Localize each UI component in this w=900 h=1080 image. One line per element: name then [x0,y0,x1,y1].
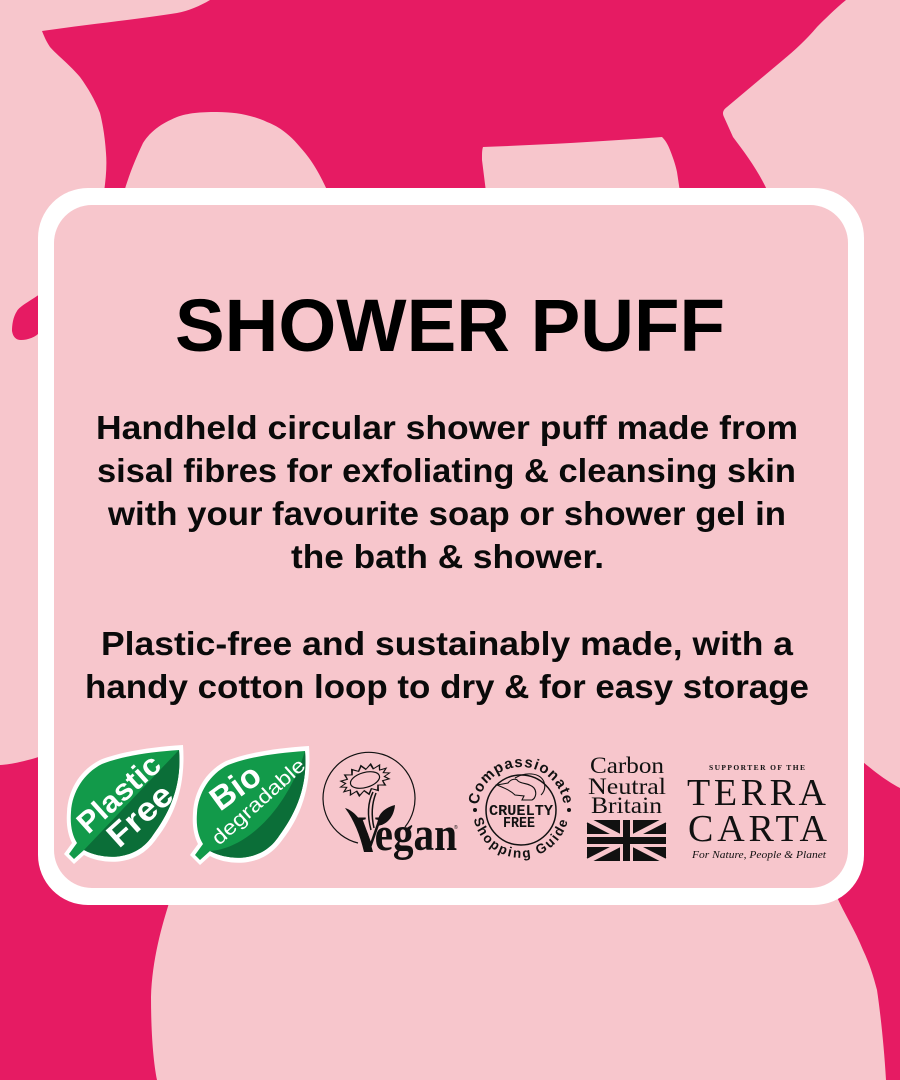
badge: terra carta: SUPPORTER OF THE [709,763,805,772]
badge: carbon neutral britain: Neutral [588,774,666,799]
badge: vegan: ® [454,824,458,831]
sustainability text: handy cotton loop to dry & for easy storage [85,668,809,705]
badge: cruelty free: Shopping Guide [474,818,567,860]
union flag [587,820,666,861]
badge: biodegradable leaf [190,746,310,865]
badge: cruelty free: FREE [503,815,535,832]
description text: Handheld circular shower puff made from [96,409,798,446]
sustainability text [85,625,809,705]
background: magenta lower right [800,762,900,1080]
flower head [335,757,395,803]
background: magenta top shape [42,0,846,192]
card [38,188,864,905]
description text [96,409,798,575]
background: magenta left fleck [12,294,40,340]
description text: the bath & shower. [291,538,604,575]
badge: plastic free leaf [64,745,183,864]
badge: plastic free leaf: Plastic [71,748,168,840]
badge: biodegradable leaf: Bio [202,756,268,818]
description text: with your favourite soap or shower gel in [107,495,786,532]
badge: terra carta: CARTA [688,808,828,850]
badge: plastic free leaf: Free [99,776,180,854]
badge: cruelty free: CRUELTY [489,803,553,820]
background: light pink notch [482,137,680,192]
badge: biodegradable leaf: degradable [208,754,310,850]
badge: vegan [323,752,458,862]
badge: cruelty free [468,758,571,860]
sustainability text: Plastic-free and sustainably made, with a [101,625,794,662]
background: magenta lower left [0,750,170,1080]
badge: vegan: Vegan [353,806,457,862]
badge: terra carta: TERRA [687,772,827,814]
icon: mouse [497,774,545,800]
badge: carbon neutral britain: Carbon [590,753,665,778]
badge: terra carta: For Nature, People & Planet [691,850,827,861]
badge: cruelty free: Compassionate [468,758,571,804]
description text: sisal fibres for exfoliating & cleansing skin [97,452,796,489]
badge: terra carta [687,763,828,861]
badge: carbon neutral britain: Britain [591,793,663,818]
badge: carbon neutral britain [587,753,666,861]
title: SHOWER PUFF [175,284,725,367]
